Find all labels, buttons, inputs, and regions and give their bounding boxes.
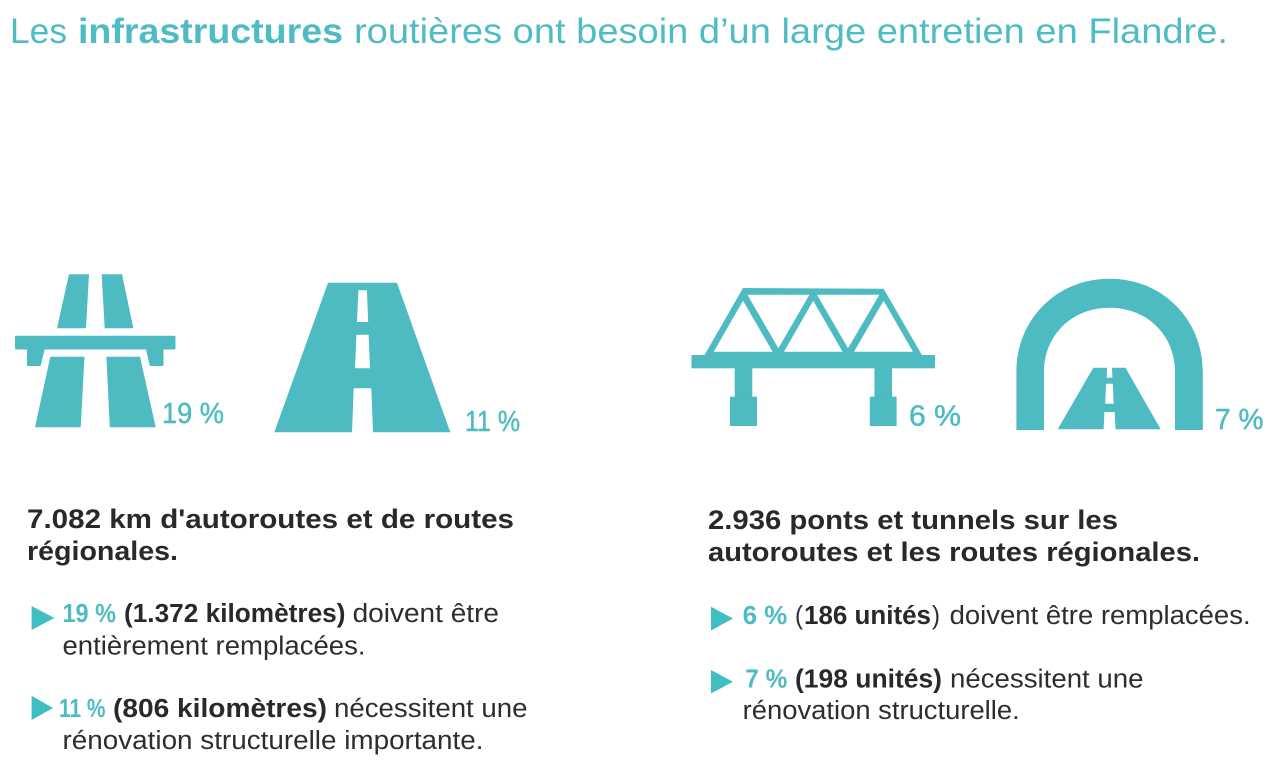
bullet: 6 percent: 186 unités xyxy=(804,602,931,630)
bullet: 6 percent xyxy=(711,602,1251,630)
title xyxy=(10,12,1228,51)
bullet: 6 percent: 6 % xyxy=(743,602,787,630)
bullet: 6 percent: doivent être remplacées. xyxy=(950,602,1251,630)
heading: roads: 7.082 km d'autoroutes et de routes xyxy=(27,504,514,534)
bullet: 7 percent: 7 % xyxy=(745,666,787,694)
bullet: 11 percent xyxy=(32,695,527,755)
percentage: bridge: 6 % xyxy=(909,400,961,432)
icon: regional road xyxy=(274,283,450,432)
percentage: tunnel: 7 % xyxy=(1215,404,1264,436)
icon: highway xyxy=(15,274,176,427)
icon: bridge xyxy=(692,288,935,426)
heading: roads: régionales. xyxy=(27,536,178,566)
bullet: 7 percent: (198 unités) xyxy=(795,666,942,694)
heading: bridges and tunnels: 2.936 ponts et tunnels sur les xyxy=(708,505,1118,535)
title: Les xyxy=(10,12,67,51)
bullet: 7 percent: nécessitent une xyxy=(950,666,1144,694)
panel: bridges and tunnels text xyxy=(708,505,1251,725)
bullet: 7 percent xyxy=(711,666,1144,725)
bullet: 19 percent: 19 % xyxy=(62,600,116,628)
bullet: 11 percent: (806 kilomètres) xyxy=(113,695,327,723)
percentage: highway: 19 % xyxy=(162,398,224,430)
title: routières ont besoin d’un large entretien en Flandre. xyxy=(354,12,1228,51)
bullet: 11 percent: nécessitent une xyxy=(334,695,528,723)
bullet: 11 percent: rénovation structurelle importante. xyxy=(62,727,484,755)
bullet: 7 percent: rénovation structurelle. xyxy=(743,697,1020,725)
icon: tunnel xyxy=(1016,279,1203,430)
title: infrastructures xyxy=(78,12,343,51)
heading: bridges and tunnels xyxy=(708,505,1200,567)
bullet: 6 percent: ( xyxy=(795,602,803,630)
panel: roads text xyxy=(27,504,528,755)
percentage: regional road: 11 % xyxy=(465,406,520,438)
bullet: 11 percent: 11 % xyxy=(59,695,106,723)
heading: bridges and tunnels: autoroutes et les routes régionales. xyxy=(708,537,1200,567)
heading: roads xyxy=(27,504,514,566)
bullet: 19 percent: doivent être xyxy=(353,600,499,628)
bullet: 19 percent xyxy=(32,600,499,660)
bullet: 19 percent: (1.372 kilomètres) xyxy=(124,600,346,628)
bullet: 6 percent: ) xyxy=(932,602,940,630)
bullet: 19 percent: entièrement remplacées. xyxy=(62,632,366,660)
